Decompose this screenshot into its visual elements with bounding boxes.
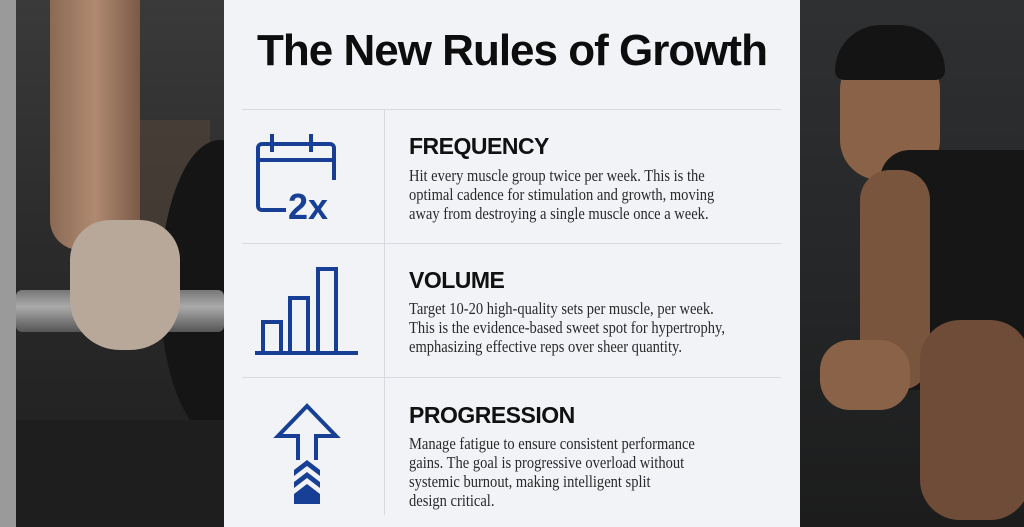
icon: calendar 2x	[256, 134, 336, 222]
heading: frequency: FREQUENCY	[409, 133, 549, 159]
text: frequency: optimal cadence for stimulation and growth, moving	[409, 185, 714, 204]
text: volume: emphasizing effective reps over sheer quantity.	[409, 337, 682, 356]
text: progression	[409, 434, 695, 510]
text: progression: gains. The goal is progressive overload without	[409, 453, 684, 472]
left photo: barbell grip	[0, 0, 224, 527]
text: frequency	[409, 166, 714, 223]
text: volume	[409, 299, 725, 356]
text: volume: This is the evidence-based sweet spot for hypertrophy,	[409, 318, 725, 337]
text: frequency: away from destroying a single muscle once a week.	[409, 204, 709, 223]
heading: progression: PROGRESSION	[409, 402, 575, 428]
text: frequency: Hit every muscle group twice per week. This is the	[409, 166, 705, 185]
text: progression: systemic burnout, making intelligent split	[409, 472, 651, 491]
icon: up arrow	[273, 403, 341, 504]
icon: bar chart	[255, 267, 358, 355]
text: progression: Manage fatigue to ensure consistent performance	[409, 434, 695, 453]
centre panel	[224, 0, 800, 527]
text: progression: design critical.	[409, 491, 494, 510]
dividers	[242, 109, 781, 110]
title: The New Rules of Growth	[257, 26, 767, 75]
right photo: seated athlete	[800, 0, 1024, 527]
text: volume: Target 10-20 high-quality sets per muscle, per week.	[409, 299, 714, 318]
heading: volume: VOLUME	[409, 267, 504, 293]
